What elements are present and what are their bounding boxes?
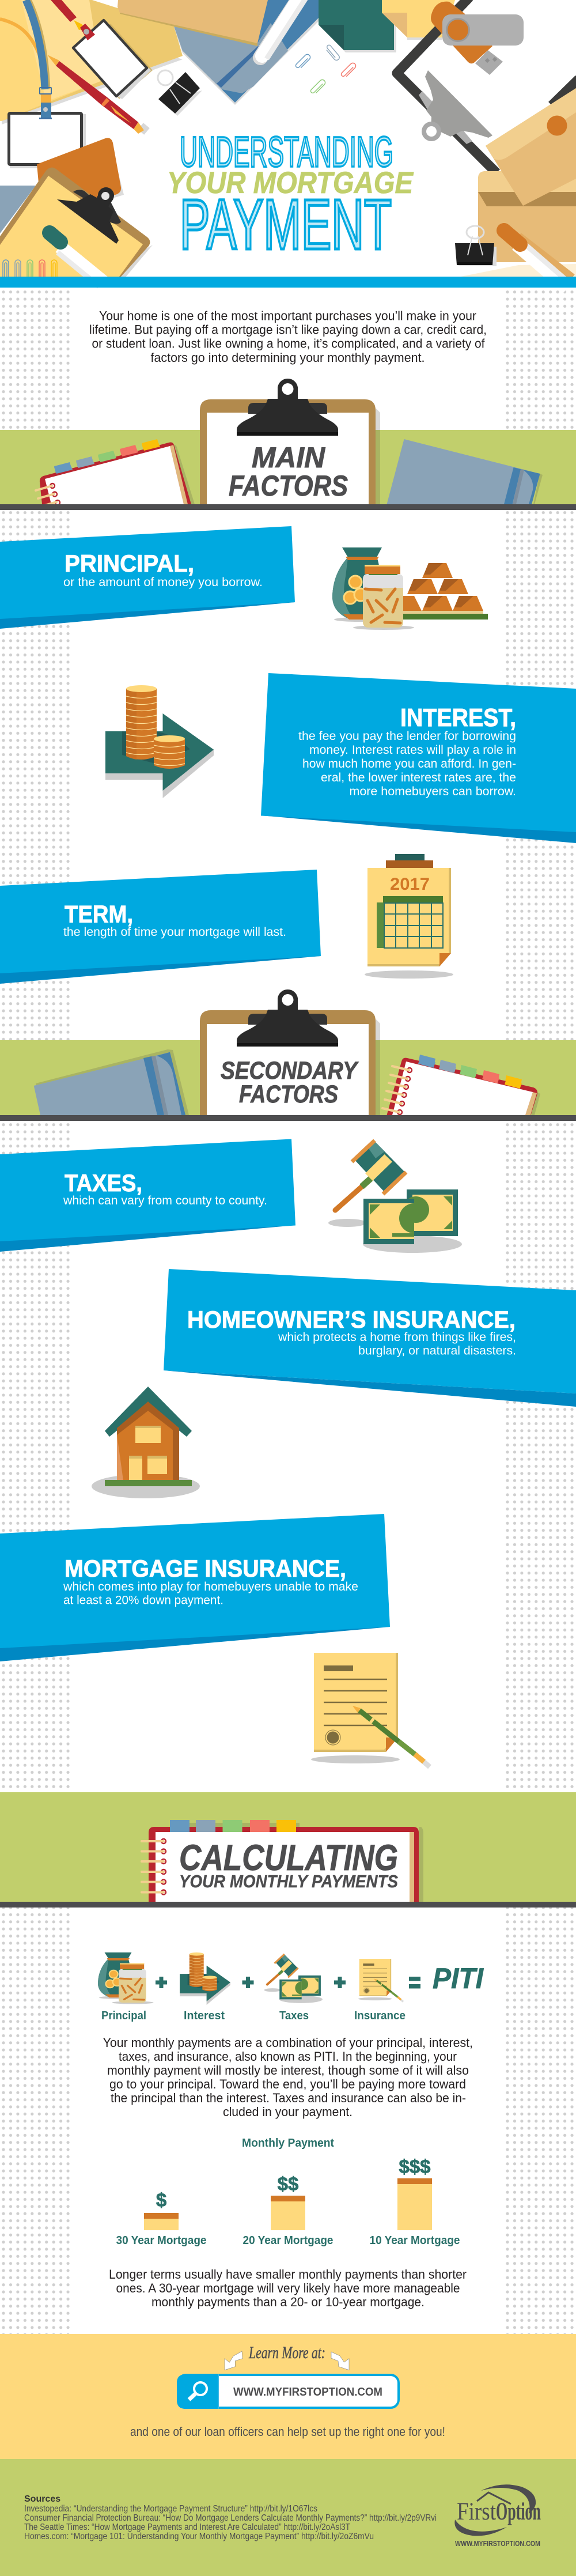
panel: term: TERM, [65, 900, 133, 928]
icon: calendar [365, 854, 453, 979]
heading: main factors: FACTORS [229, 470, 348, 502]
url: WWW.MYFIRSTOPTION.COM [233, 2386, 382, 2399]
green band: secondary factors [0, 1040, 576, 1116]
PITI label: PITI [433, 1962, 484, 1995]
title: PAYMENT [180, 186, 392, 265]
blue divider bar [0, 277, 576, 288]
sources: Consumer Financial Protection Bureau: “How Do Mortgage Lenders Calculate Monthly Payments?” http://bit.ly/2p9VRvi [24, 2513, 437, 2523]
panel: homeowner's insurance: burglary, or natural disasters. [358, 1344, 516, 1358]
dark bar [0, 1115, 576, 1121]
panel: homeowner's insurance [164, 1269, 576, 1407]
bar: 10 year mortgage: $$$ [399, 2156, 431, 2177]
PITI explanation text: monthly payment will mostly be interest, though some of it will also [107, 2063, 469, 2078]
gray clip on tablet [419, 70, 492, 144]
logo: First Option: WWW.MYFIRSTOPTION.COM [455, 2540, 540, 2548]
tan folder and blue notebook [118, 0, 320, 105]
heading: calculating your monthly payments [179, 1838, 398, 1891]
USB stick [431, 2, 524, 75]
green band: main factors [0, 430, 576, 505]
plus sign [334, 1977, 346, 1988]
icon: gold bars [403, 563, 488, 620]
header illustration: desk items [0, 0, 576, 288]
intro text: or student loan. Just like owning a home, it’s complicated, and a variety of [92, 337, 485, 350]
panel: principal [0, 526, 295, 629]
panel: homeowner's insurance: HOMEOWNER’S INSURANCE, [187, 1306, 516, 1333]
intro text: lifetime. But paying off a mortgage isn’t like paying down a car, credit card, [89, 323, 487, 337]
clipboard: main factors [200, 379, 380, 504]
icon: house [92, 1387, 200, 1498]
PITI labels: Interest [184, 2010, 225, 2022]
background dots [0, 288, 71, 2334]
PITI explanation text [103, 2035, 473, 2119]
plus sign [242, 1977, 253, 1988]
blue book: secondary factors [34, 1049, 189, 1115]
bar: 10 year mortgage [370, 2156, 460, 2247]
title: YOUR MORTGAGE [167, 166, 414, 200]
intro text [89, 309, 487, 365]
panel: mortgage insurance: at least a 20% down payment. [63, 1594, 223, 1607]
panel: interest: more homebuyers can borrow. [349, 785, 516, 798]
logo: First Option: Option [496, 2498, 541, 2525]
sources: Sources [24, 2494, 60, 2504]
intro text: Your home is one of the most important purchases you’ll make in your [99, 309, 476, 323]
bar: 30 year mortgage: $ [156, 2189, 166, 2211]
heading: main factors [229, 441, 348, 502]
red lanyard and tilted badge [51, 0, 153, 99]
icon: money bag and jar [332, 547, 414, 630]
panel: term [0, 870, 321, 984]
closing line: and one of our loan officers can help set up the right one for you! [130, 2424, 445, 2439]
logo: First Option: First [457, 2498, 496, 2525]
PITI labels [101, 2010, 406, 2022]
sources [24, 2494, 437, 2541]
heading: secondary factors: SECONDARY [221, 1057, 359, 1085]
logo: First Option [454, 2484, 541, 2548]
teal sticky note [319, 0, 396, 52]
search bar [177, 2374, 399, 2409]
icon: taxes [264, 1954, 323, 2003]
dark bar [0, 504, 576, 510]
PITI explanation text: cluded in your payment. [223, 2105, 353, 2119]
panel: principal: PRINCIPAL, [65, 550, 194, 577]
icon: principal [98, 1952, 154, 2004]
white marker tube [260, 0, 310, 59]
pale paper at corner [461, 264, 576, 277]
heading: secondary factors [221, 1057, 359, 1108]
PITI labels: Insurance [354, 2010, 406, 2022]
orange capped marker [504, 231, 571, 288]
PITI equation [98, 1952, 484, 2005]
panel: mortgage insurance: which comes into play for homebuyers unable to make [63, 1580, 358, 1593]
bar: 30 year mortgage: 30 Year Mortgage [116, 2234, 206, 2247]
PITI labels: Principal [101, 2010, 146, 2022]
sources: Investopedia: “Understanding the Mortgage Payment Structure” http://bit.ly/1O67lcs [24, 2504, 317, 2514]
heading: main factors: MAIN [252, 441, 325, 474]
PITI explanation text: taxes, and insurance, also known as PITI. In the beginning, your [119, 2049, 457, 2064]
sources: The Seattle Times: “How Mortgage Payments and Interest Are Calculated” http://bit.ly/2oAsl3T [24, 2522, 350, 2532]
title: UNDERSTANDING [180, 128, 393, 176]
footer panel [0, 2459, 576, 2576]
icon: calendar: 2017 [390, 875, 430, 894]
panel: mortgage insurance [0, 1514, 390, 1661]
icon: document and pen [311, 1653, 430, 1767]
lower left clipboard [0, 168, 153, 281]
PITI explanation text: go to your principal. Toward the end, you’ll be paying more toward [109, 2077, 466, 2091]
term comparison text: ones. A 30-year mortgage will very likely have more manageable [116, 2281, 460, 2295]
orange note [37, 138, 124, 206]
sources: Homes.com: “Mortgage 101: Understanding Your Monthly Mortgage Payment” http://bit.ly/2oZ6mVu [24, 2532, 374, 2541]
tablet clipboard frame [397, 0, 576, 173]
notebook: calculating your monthly payments [142, 1820, 423, 1902]
panel: taxes [0, 1139, 295, 1252]
bar: 20 year mortgage: 20 Year Mortgage [243, 2234, 333, 2247]
bar: 30 year mortgage [116, 2189, 206, 2247]
arrow right [331, 2352, 349, 2370]
PITI explanation text: Your monthly payments are a combination of your principal, interest, [103, 2035, 473, 2050]
heading: calculating your monthly payments: CALCULATING [179, 1838, 398, 1878]
script heading: Learn More at: [248, 2343, 325, 2362]
heading: calculating your monthly payments: YOUR MONTHLY PAYMENTS [179, 1871, 398, 1891]
bar chart: monthly payment [116, 2137, 460, 2247]
blue book: main factors [387, 439, 543, 504]
notebook: secondary factors [382, 1055, 540, 1115]
arrow left [225, 2351, 242, 2370]
red pen [47, 55, 147, 134]
blue lanyard and badge [9, 0, 86, 168]
term comparison text [109, 2267, 467, 2309]
blue sheet lower left [0, 186, 36, 233]
intro text: factors go into determining your monthly payment. [151, 350, 425, 365]
icon: insurance [358, 1959, 403, 2001]
panel: interest: money. Interest rates will play a role in [309, 743, 516, 757]
panel: mortgage insurance: MORTGAGE INSURANCE, [65, 1555, 346, 1582]
notebook: main factors [36, 439, 195, 507]
panel: interest: eral, the lower interest rates are, the [321, 771, 516, 784]
PITI explanation text: the principal than the interest. Taxes and insurance can also be in- [111, 2091, 466, 2105]
PITI labels: Taxes [279, 2010, 309, 2022]
plus sign [156, 1977, 167, 1988]
equals sign [409, 1977, 420, 1988]
green band: calculating [0, 1792, 576, 1902]
panel: taxes: TAXES, [65, 1169, 142, 1196]
orange cord [0, 19, 41, 61]
heading: secondary factors: FACTORS [239, 1081, 338, 1108]
paper sheets [0, 0, 183, 124]
panel: interest [261, 673, 576, 843]
panel: interest: how much home you can afford. In gen- [302, 757, 516, 770]
folder and envelope [478, 88, 576, 262]
icon: magnifier [189, 2382, 207, 2400]
title [167, 128, 414, 265]
yellow call to action panel [0, 2334, 576, 2459]
term comparison text: monthly payments than a 20- or 10-year mortgage. [151, 2295, 425, 2309]
icon: interest [180, 1952, 230, 2005]
clipboard: secondary factors [200, 989, 380, 1115]
icon: gavel and money [328, 1140, 462, 1253]
panel: interest: the fee you pay the lender for borrowing [298, 730, 516, 743]
icon: coins and arrow [105, 685, 214, 798]
binder clip [158, 70, 202, 116]
term comparison text: Longer terms usually have smaller monthly payments than shorter [109, 2267, 467, 2282]
paper clips row [3, 260, 57, 277]
dark bar [0, 1902, 576, 1908]
panel: term: the length of time your mortgage will last. [63, 926, 286, 939]
green capped marker [50, 233, 104, 286]
bar: 20 year mortgage: $$ [278, 2173, 298, 2194]
panel: homeowner's insurance: which protects a home from things like fires, [278, 1331, 516, 1344]
paper clips [295, 0, 426, 95]
bar: 20 year mortgage [243, 2173, 333, 2247]
yellow sticky note [382, 0, 455, 40]
bar: 10 year mortgage: 10 Year Mortgage [370, 2234, 460, 2247]
second binder clip [455, 226, 497, 266]
chart title: Monthly Payment [242, 2137, 334, 2150]
panel: interest: INTEREST, [400, 704, 516, 732]
panel: principal: or the amount of money you borrow. [63, 576, 263, 589]
panel: taxes: which can vary from county to county. [63, 1194, 267, 1207]
